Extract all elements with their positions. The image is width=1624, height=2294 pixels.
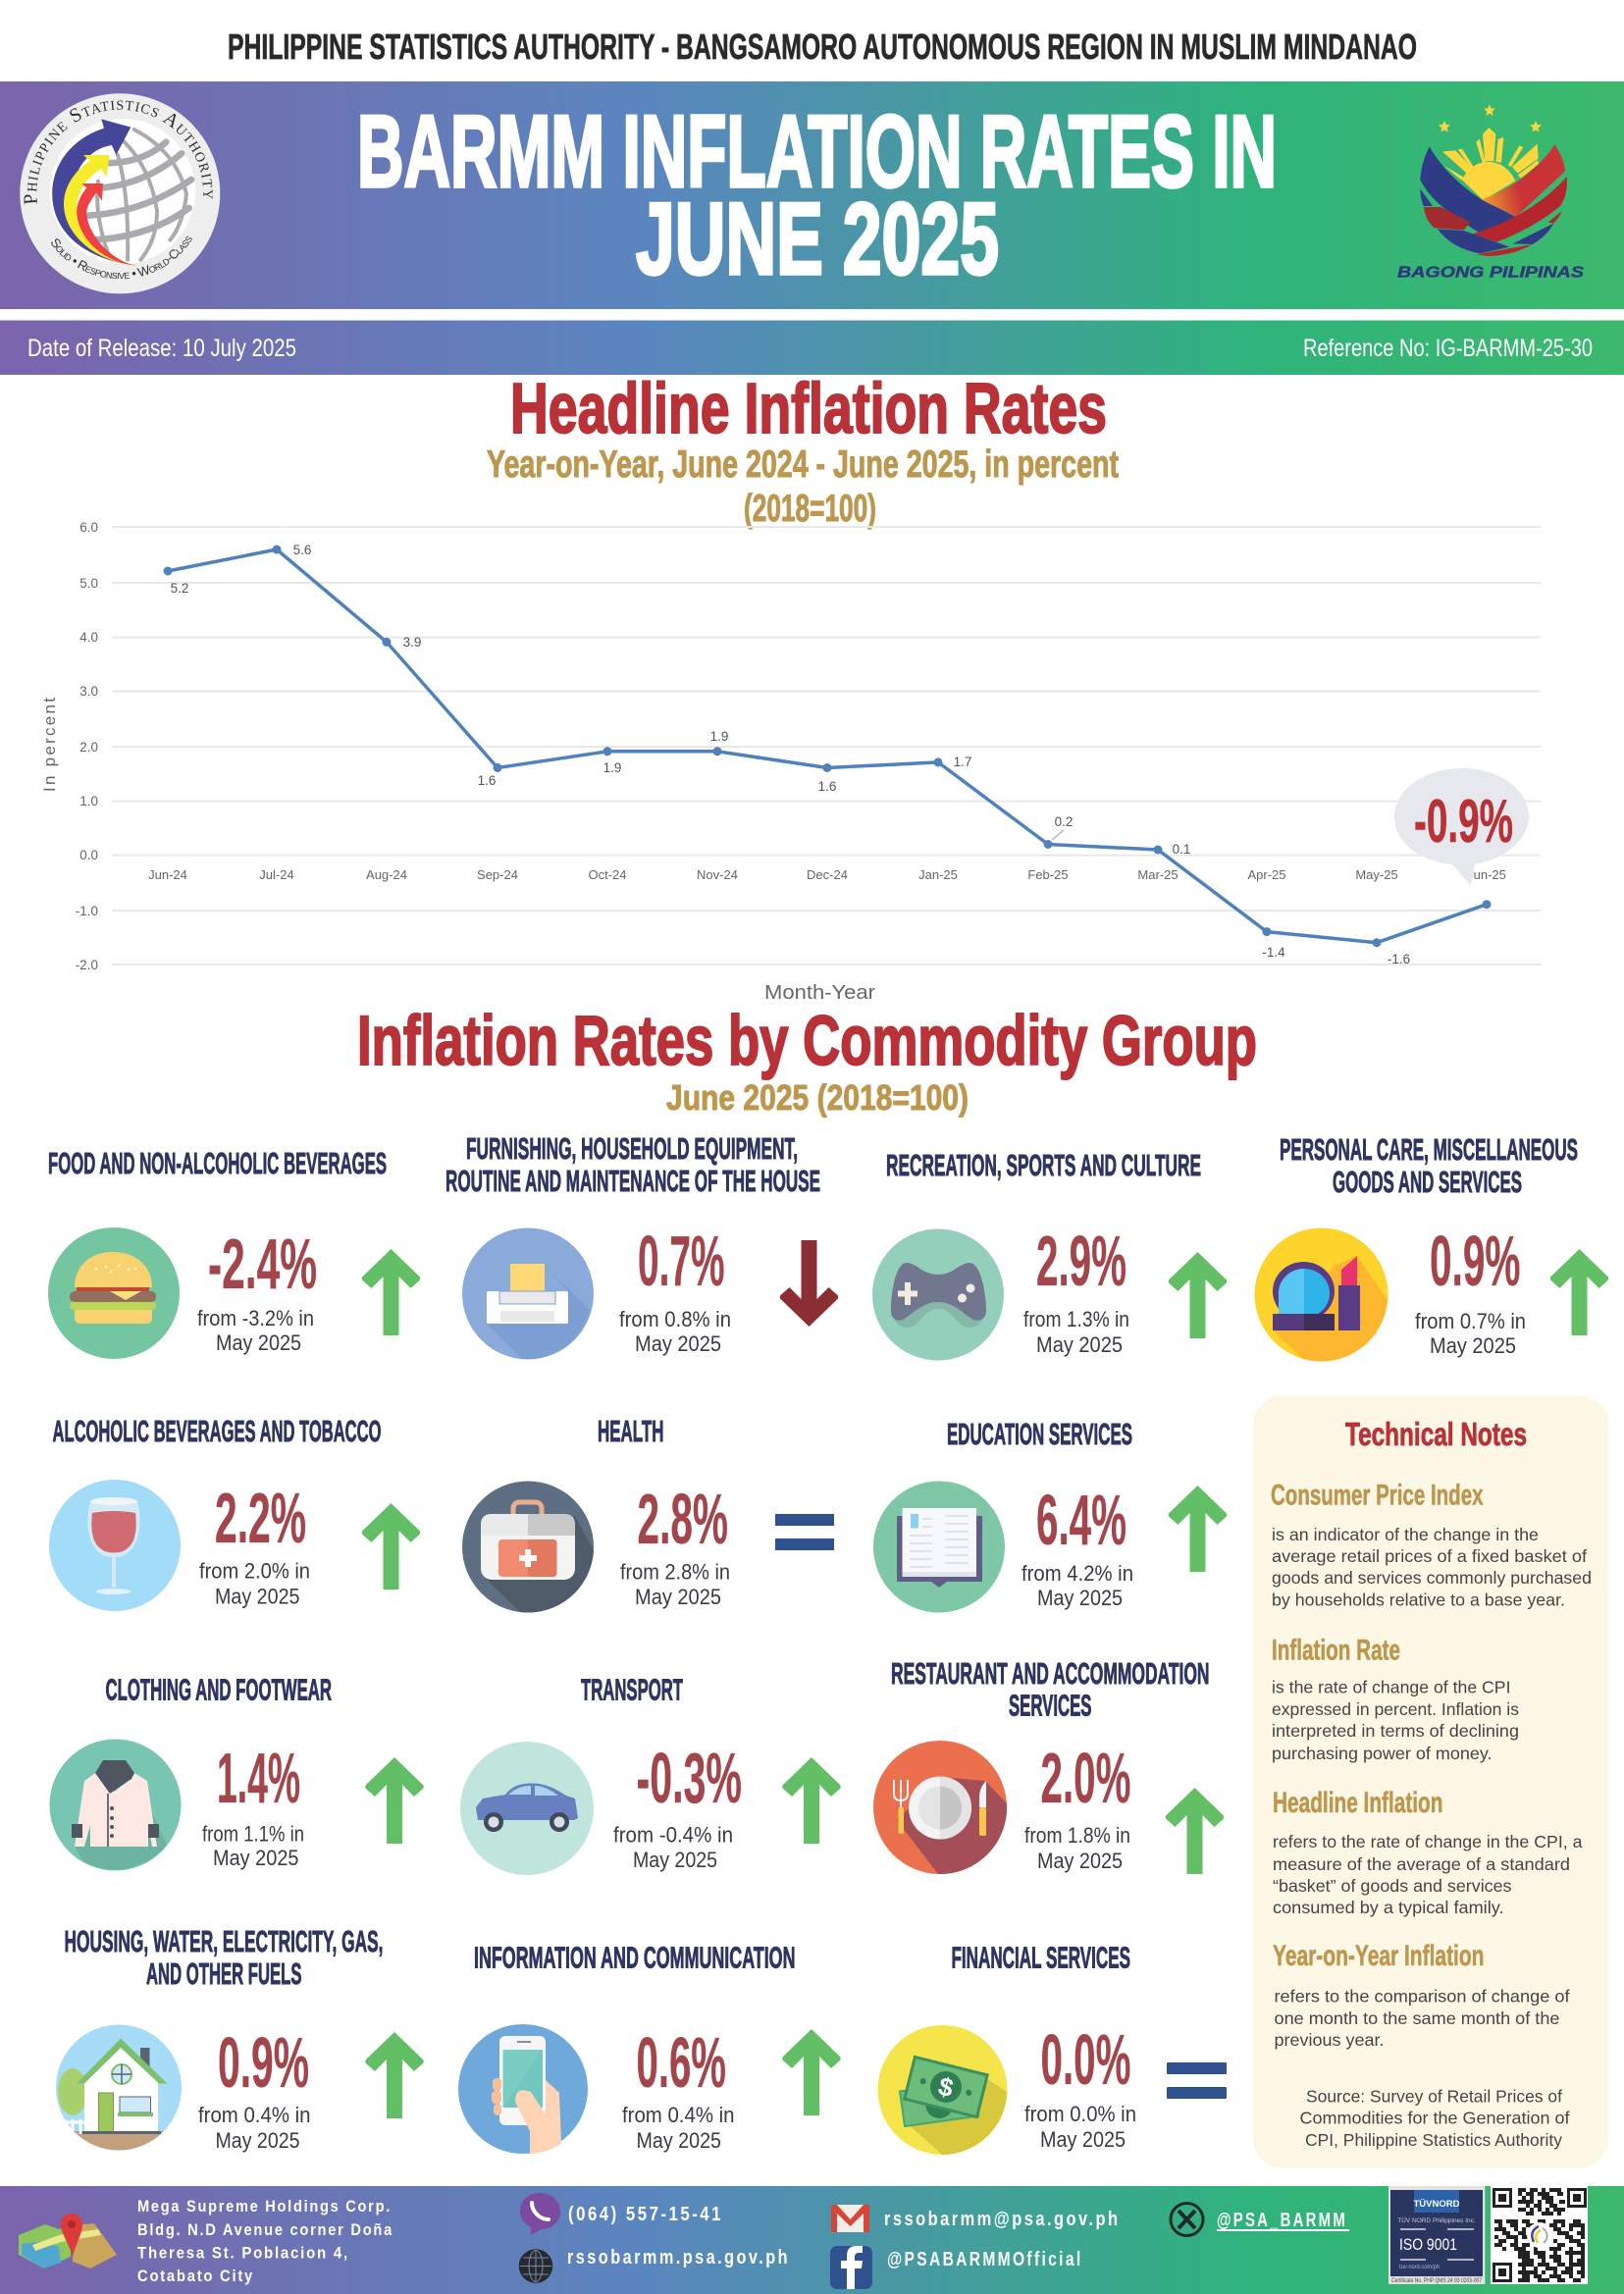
certification badge xyxy=(1388,2186,1485,2284)
arrow: up xyxy=(782,1757,841,1844)
arrow: up xyxy=(1166,1788,1224,1874)
certification badge: ISO 9001 xyxy=(1399,2235,1457,2254)
arrow: up xyxy=(365,1757,424,1844)
note: year-on-year inflation: Year-on-Year Inflation xyxy=(1273,1940,1484,1972)
heading: headline inflation: Year-on-Year, June 2024 - June 2025, in percent xyxy=(487,443,1119,486)
callout: latest rate xyxy=(1394,768,1529,886)
data labels: 0.2 xyxy=(1055,814,1073,829)
panel: furnishing: FURNISHING, HOUSEHOLD EQUIPMENT, xyxy=(466,1131,798,1166)
logo: Philippine Statistics Authority: Solid • Responsive • World-Class xyxy=(51,235,192,279)
panel: clothing: May 2025 xyxy=(213,1846,298,1870)
note: year-on-year inflation: refers to the comparison of change of xyxy=(1274,1986,1570,2006)
source note xyxy=(1299,2086,1570,2150)
panel: furnishing: ROUTINE AND MAINTENANCE OF THE HOUSE xyxy=(445,1164,820,1198)
panel: housing: from 0.4% in xyxy=(198,2103,310,2127)
footer xyxy=(0,2186,1624,2294)
panel: education: 6.4% xyxy=(1036,1482,1126,1560)
x axis labels xyxy=(148,867,1506,882)
data labels: 5.6 xyxy=(293,543,311,557)
panel: transport: -0.3% xyxy=(636,1740,742,1818)
data labels: 1.6 xyxy=(478,773,496,788)
note: inflation rate xyxy=(1272,1635,1519,1763)
panel: recreation: from 1.3% in xyxy=(1023,1307,1129,1331)
note: headline inflation: Headline Inflation xyxy=(1273,1787,1442,1819)
panel: housing: AND OTHER FUELS xyxy=(146,1956,302,1991)
arrow: up xyxy=(782,2029,841,2115)
panel: personal care: May 2025 xyxy=(1430,1333,1516,1358)
website: rssobarmm.psa.gov.ph xyxy=(567,2247,790,2268)
note: inflation rate: Inflation Rate xyxy=(1272,1635,1400,1666)
x axis labels: Dec-24 xyxy=(807,867,848,882)
data labels xyxy=(171,543,1410,966)
leader line for 0.2 label xyxy=(1052,830,1064,840)
logo: Bagong Pilipinas xyxy=(1397,104,1585,281)
panel: restaurant xyxy=(873,1656,1224,1874)
y axis ticks: 1.0 xyxy=(79,794,98,808)
note: year-on-year inflation: one month to the same month of the xyxy=(1274,2008,1560,2028)
heading: commodity group: June 2025 (2018=100) xyxy=(666,1077,969,1118)
note: year-on-year inflation xyxy=(1273,1940,1570,2050)
panel: furnishing xyxy=(445,1131,838,1360)
source note: CPI, Philippine Statistics Authority xyxy=(1305,2130,1562,2150)
panel: education xyxy=(873,1417,1227,1613)
panel: information xyxy=(458,1941,841,2154)
data labels: 1.9 xyxy=(710,729,728,744)
panel: restaurant: 2.0% xyxy=(1040,1740,1130,1818)
icon: printer xyxy=(462,1228,594,1360)
callout: latest rate: -0.9% xyxy=(1414,788,1513,856)
icon: money xyxy=(877,2025,1007,2155)
note: inflation rate: interpreted in terms of declining xyxy=(1272,1721,1519,1741)
panel: food and non-alcoholic beverages: May 2025 xyxy=(216,1330,301,1355)
panel: housing: May 2025 xyxy=(216,2128,300,2153)
x axis labels: Nov-24 xyxy=(697,867,738,882)
data labels: 5.2 xyxy=(171,581,188,596)
x axis labels: Jul-24 xyxy=(259,867,294,882)
x axis labels: Feb-25 xyxy=(1027,867,1069,882)
panel: food and non-alcoholic beverages xyxy=(48,1146,420,1359)
icon: makeup xyxy=(1254,1228,1388,1362)
icon: plate and cutlery xyxy=(873,1741,1007,1874)
y axis ticks: 2.0 xyxy=(79,740,98,755)
panel: food and non-alcoholic beverages: from -3.2% in xyxy=(197,1306,314,1330)
logo: Philippine Statistics Authority xyxy=(20,93,220,294)
note: headline inflation: consumed by a typical family. xyxy=(1273,1898,1503,1917)
icon: game controller xyxy=(872,1228,1004,1360)
x axis labels: Jan-25 xyxy=(918,867,958,882)
panel: technical notes xyxy=(1253,1395,1609,2168)
icon: car xyxy=(460,1742,594,1875)
icon: equals sign xyxy=(775,1514,834,1550)
panel: transport: May 2025 xyxy=(633,1848,717,1872)
panel: financial services: 0.0% xyxy=(1040,2021,1130,2100)
address: Bldg. N.D Avenue corner Doña xyxy=(137,2220,393,2239)
arrow: up xyxy=(362,1503,420,1590)
note: headline inflation xyxy=(1273,1787,1583,1917)
panel: furnishing: May 2025 xyxy=(635,1331,721,1356)
panel: education: from 4.2% in xyxy=(1022,1561,1133,1586)
heading: commodity group: Inflation Rates by Commodity Group xyxy=(357,1003,1257,1080)
panel: personal care: from 0.7% in xyxy=(1415,1309,1526,1333)
panel: restaurant: May 2025 xyxy=(1037,1849,1123,1873)
x axis labels: Oct-24 xyxy=(588,867,627,882)
source note: Commodities for the Generation of xyxy=(1299,2108,1570,2127)
y axis ticks xyxy=(76,520,98,972)
x axis labels: Jun-25 xyxy=(1467,867,1506,882)
panel: personal care xyxy=(1254,1132,1608,1362)
arrow: up xyxy=(365,2032,424,2118)
panel: transport xyxy=(460,1672,841,1875)
panel: information: May 2025 xyxy=(636,2128,721,2153)
data labels: -1.4 xyxy=(1262,945,1285,960)
y axis ticks: 0.0 xyxy=(79,848,98,862)
arrow: up xyxy=(362,1249,420,1335)
x axis labels: Aug-24 xyxy=(366,867,407,882)
icon: money: $ xyxy=(935,2071,957,2103)
line chart: headline inflation xyxy=(40,520,1541,1004)
icon: smartphone in hand xyxy=(458,2024,588,2154)
panel: alcoholic beverages: 2.2% xyxy=(215,1480,306,1558)
note: consumer price index: by households relative to a base year. xyxy=(1272,1590,1565,1609)
heading: headline inflation: (2018=100) xyxy=(744,488,876,530)
note: headline inflation: measure of the average of a standard xyxy=(1273,1854,1570,1874)
icon: x xyxy=(1171,2204,1203,2235)
heading: headline inflation xyxy=(487,370,1119,530)
address: Cotabato City xyxy=(137,2267,254,2285)
y axis ticks: 4.0 xyxy=(79,630,98,645)
main title xyxy=(357,95,1277,296)
panel: education: May 2025 xyxy=(1037,1586,1123,1610)
logo: Philippine Statistics Authority: Philippine Statistics Authority xyxy=(24,100,213,204)
y axis ticks: -1.0 xyxy=(76,904,98,918)
icon: house xyxy=(56,2025,182,2151)
note: consumer price index xyxy=(1271,1480,1592,1609)
panel: recreation xyxy=(872,1148,1227,1360)
panel: housing: HOUSING, WATER, ELECTRICITY, GAS, xyxy=(65,1924,383,1958)
x axis labels: Jun-24 xyxy=(148,867,187,882)
logo: Bagong Pilipinas: BAGONG PILIPINAS xyxy=(1397,265,1585,281)
heading: headline inflation: Headline Inflation Rates xyxy=(510,370,1107,448)
icon: map pin xyxy=(19,2214,117,2268)
panel: housing xyxy=(56,1924,424,2153)
panel: financial services: FINANCIAL SERVICES xyxy=(952,1941,1130,1974)
panel: information: INFORMATION AND COMMUNICATION xyxy=(474,1941,795,1974)
panel: financial services xyxy=(877,1941,1227,2155)
icon: gmail xyxy=(831,2205,869,2232)
icon: open book xyxy=(873,1482,1005,1613)
note: consumer price index: average retail prices of a fixed basket of xyxy=(1272,1546,1587,1566)
panel: restaurant: SERVICES xyxy=(1009,1688,1091,1723)
panel: restaurant: RESTAURANT AND ACCOMMODATION xyxy=(891,1656,1209,1691)
data labels: 3.9 xyxy=(403,635,421,650)
certification badge: tuv-nord.com/ph xyxy=(1399,2265,1440,2270)
x axis labels: Apr-25 xyxy=(1247,867,1286,882)
panel: education: EDUCATION SERVICES xyxy=(947,1417,1132,1451)
y axis title: In percent xyxy=(40,698,59,792)
panel: alcoholic beverages: ALCOHOLIC BEVERAGES AND TOBACCO xyxy=(53,1414,381,1448)
arrow: down xyxy=(780,1240,838,1327)
note: headline inflation: refers to the rate of change in the CPI, a xyxy=(1273,1832,1583,1851)
icon: globe xyxy=(520,2251,551,2282)
panel: financial services: from 0.0% in xyxy=(1024,2102,1136,2126)
panel: recreation: 2.9% xyxy=(1036,1223,1126,1301)
panel: transport: TRANSPORT xyxy=(581,1672,683,1707)
panel: clothing xyxy=(49,1672,424,1870)
note: inflation rate: purchasing power of money. xyxy=(1272,1744,1492,1763)
panel: alcoholic beverages: May 2025 xyxy=(215,1584,300,1609)
arrow: up xyxy=(1169,1486,1227,1572)
panel: information: from 0.4% in xyxy=(622,2103,734,2127)
note: inflation rate: expressed in percent. Inflation is xyxy=(1272,1699,1519,1719)
data labels: -1.6 xyxy=(1388,952,1410,966)
panel: financial services: May 2025 xyxy=(1040,2127,1126,2152)
QR code xyxy=(1491,2186,1588,2284)
phone number: (064) 557-15-41 xyxy=(568,2204,723,2225)
panel: health: from 2.8% in xyxy=(620,1560,730,1584)
facebook handle: @PSABARMMOfficial xyxy=(887,2249,1083,2270)
title banner xyxy=(0,81,1624,309)
release info strip xyxy=(0,320,1624,375)
y axis ticks: 6.0 xyxy=(79,520,98,535)
panel: housing: 0.9% xyxy=(218,2024,309,2103)
icon: wine glass xyxy=(49,1480,181,1611)
icon: burger xyxy=(48,1227,180,1359)
panel: clothing: 1.4% xyxy=(217,1740,300,1818)
panel: clothing: from 1.1% in xyxy=(202,1821,304,1847)
panel: recreation: May 2025 xyxy=(1036,1332,1123,1357)
data labels: 1.9 xyxy=(603,760,621,775)
panel: alcoholic beverages xyxy=(49,1414,420,1611)
icon: equals sign xyxy=(1167,2062,1227,2099)
note: year-on-year inflation: previous year. xyxy=(1274,2030,1384,2050)
panel: recreation: RECREATION, SPORTS AND CULTURE xyxy=(886,1148,1201,1182)
address xyxy=(137,2197,393,2285)
arrow: up xyxy=(1550,1249,1608,1335)
arrow: up xyxy=(1169,1252,1227,1338)
panel: furnishing: 0.7% xyxy=(638,1223,724,1301)
heading: commodity group xyxy=(357,1003,1257,1118)
panel: clothing: CLOTHING AND FOOTWEAR xyxy=(106,1672,332,1707)
address: Mega Supreme Holdings Corp. xyxy=(137,2197,392,2216)
x axis title: Month-Year xyxy=(764,982,875,1004)
notes heading: Technical Notes xyxy=(1345,1416,1527,1452)
note: inflation rate: is the rate of change of the CPI xyxy=(1272,1678,1511,1697)
data labels: 0.1 xyxy=(1173,842,1190,857)
note: consumer price index: goods and services commonly purchased xyxy=(1272,1568,1592,1588)
panel: furnishing: from 0.8% in xyxy=(619,1307,731,1331)
x axis labels: Sep-24 xyxy=(477,867,518,882)
note: consumer price index: is an indicator of the change in the xyxy=(1272,1525,1539,1544)
note: headline inflation: “basket” of goods and services xyxy=(1273,1876,1512,1896)
icon: coat xyxy=(49,1739,181,1870)
panel: health: 2.8% xyxy=(638,1481,728,1559)
note: consumer price index: Consumer Price Index xyxy=(1271,1480,1484,1511)
data line xyxy=(163,546,1492,947)
address: Theresa St. Poblacion 4, xyxy=(137,2243,349,2263)
source note: Source: Survey of Retail Prices of xyxy=(1306,2086,1562,2106)
panel: food and non-alcoholic beverages: FOOD AND NON-ALCOHOLIC BEVERAGES xyxy=(48,1146,387,1180)
date of release: Date of Release: 10 July 2025 xyxy=(27,335,296,362)
panel: health: HEALTH xyxy=(598,1414,663,1448)
panel: transport: from -0.4% in xyxy=(613,1823,733,1847)
panel: health xyxy=(462,1414,834,1613)
certification badge: TÜVNORD xyxy=(1414,2199,1460,2210)
certification badge: Certificate No. PHP QMS 24 93 0203-007 xyxy=(1391,2278,1483,2284)
panel: information: 0.6% xyxy=(636,2024,726,2103)
panel: health: May 2025 xyxy=(635,1585,721,1609)
data labels: 1.6 xyxy=(818,779,836,794)
main title: JUNE 2025 xyxy=(636,182,999,296)
y axis ticks: 5.0 xyxy=(79,576,98,591)
icon: medical kit xyxy=(462,1482,594,1613)
x axis labels: May-25 xyxy=(1355,867,1398,882)
panel: food and non-alcoholic beverages: -2.4% xyxy=(208,1225,317,1304)
panel: alcoholic beverages: from 2.0% in xyxy=(199,1558,310,1584)
certification badge: TÜV NORD Philippines Inc. xyxy=(1397,2216,1476,2224)
x handle: @PSA_BARMM xyxy=(1217,2210,1347,2231)
panel: personal care: 0.9% xyxy=(1430,1223,1521,1301)
email: rssobarmm@psa.gov.ph xyxy=(884,2209,1121,2230)
panel: restaurant: from 1.8% in xyxy=(1024,1823,1130,1848)
icon: facebook xyxy=(830,2246,872,2289)
y axis ticks: -2.0 xyxy=(76,958,98,972)
icon: viber xyxy=(520,2193,560,2235)
data labels: 1.7 xyxy=(954,755,971,769)
x axis labels: Mar-25 xyxy=(1137,867,1179,882)
y axis ticks: 3.0 xyxy=(79,684,98,699)
